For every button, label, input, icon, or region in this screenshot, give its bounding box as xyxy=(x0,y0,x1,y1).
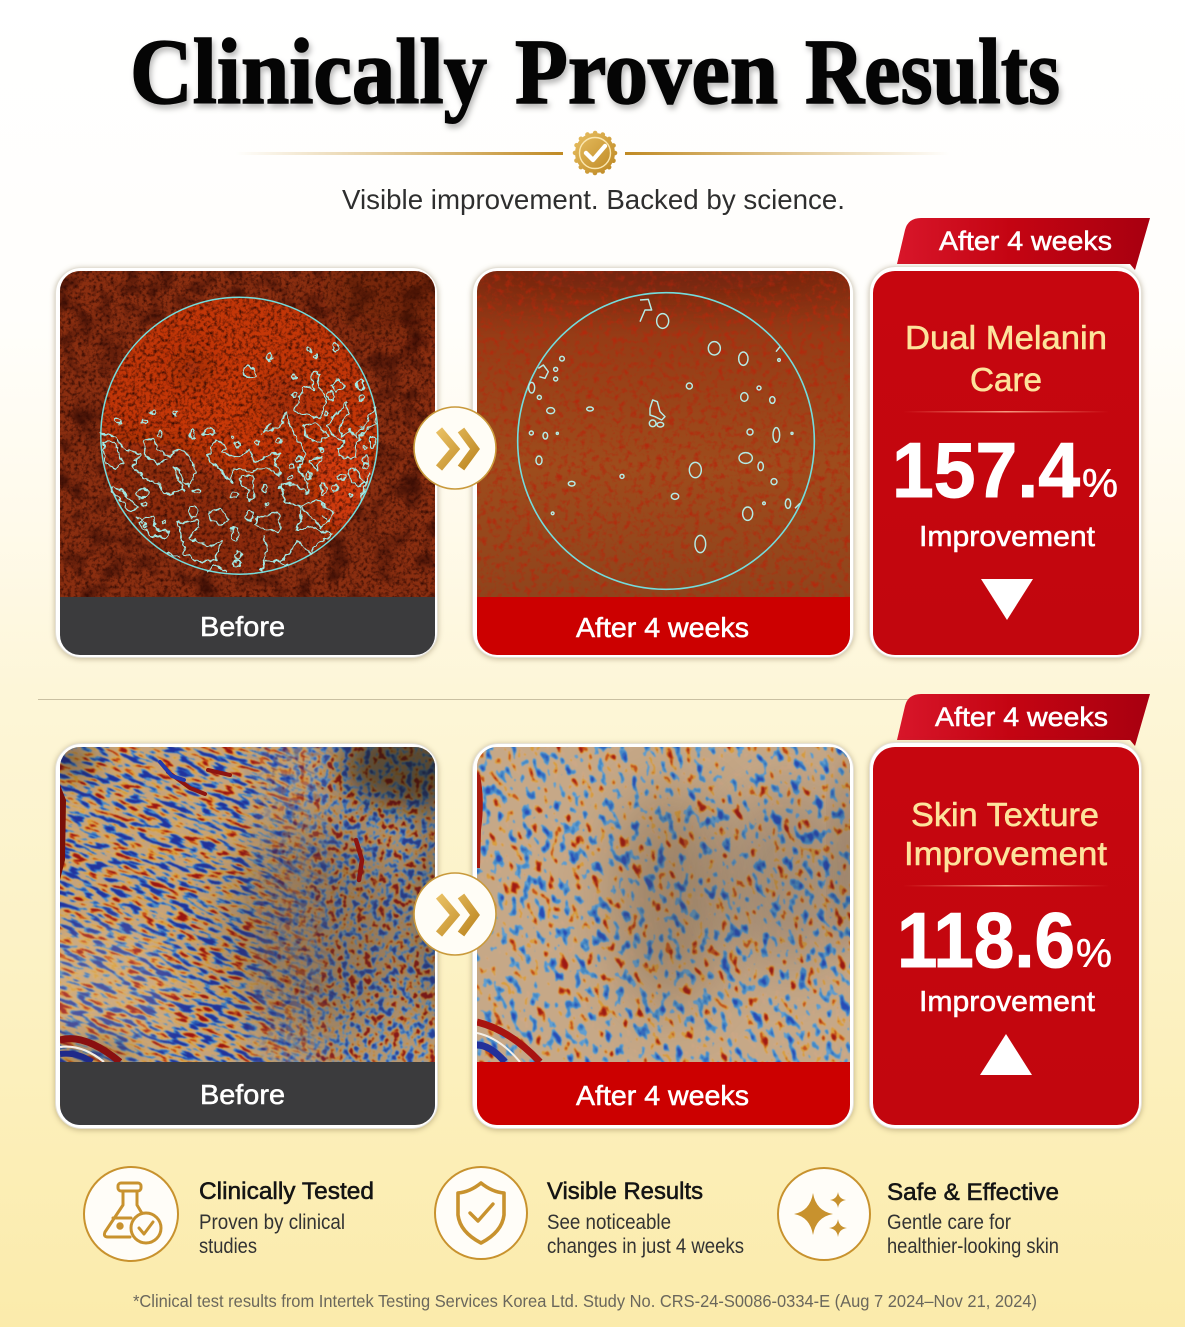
label: after 4 weeks: After 4 weeks xyxy=(576,612,749,643)
feature text: See noticeable xyxy=(547,1211,671,1234)
panel: texture before xyxy=(52,741,441,1133)
label: before: Before xyxy=(200,1079,285,1110)
feature text: healthier-looking skin xyxy=(887,1235,1059,1258)
panel: melanin before xyxy=(56,250,470,658)
statistic: 118.6 xyxy=(897,896,1075,984)
cyan measurement circle xyxy=(101,297,378,574)
heading xyxy=(904,796,1107,872)
melanin after image xyxy=(477,264,850,597)
heading xyxy=(905,319,1107,398)
label: after 4 weeks: After 4 weeks xyxy=(576,1080,749,1111)
feature text: Visible Results xyxy=(547,1178,703,1205)
title xyxy=(130,21,1060,124)
panel: dual melanin care result xyxy=(870,266,1142,658)
icon: sparkles xyxy=(778,1168,870,1260)
tab: after 4 weeks melanin xyxy=(897,218,1150,270)
statistic: 157.4 xyxy=(892,426,1080,514)
panel: melanin after xyxy=(472,264,854,658)
arrow: melanin before to after xyxy=(414,407,496,489)
title divider with badge xyxy=(235,133,950,173)
feature text: Safe & Effective xyxy=(887,1179,1059,1206)
heading: Skin Texture xyxy=(911,796,1099,833)
icon: down triangle xyxy=(981,579,1033,620)
feature text: studies xyxy=(199,1235,257,1258)
melanin spot outlines xyxy=(518,293,814,589)
tab: after 4 weeks melanin: After 4 weeks xyxy=(939,226,1112,256)
arrow: texture before to after xyxy=(414,873,496,955)
icon: shield with check xyxy=(435,1167,527,1259)
label bar: before xyxy=(60,1062,435,1126)
tab: after 4 weeks texture: After 4 weeks xyxy=(935,702,1108,732)
icon: up triangle xyxy=(980,1034,1032,1075)
heading: Dual Melanin xyxy=(905,319,1107,356)
title: Proven xyxy=(515,21,778,124)
footnote: *Clinical test results from Intertek Testing Services Korea Ltd. Study No. CRS-24-S0086-0334-E (Aug 7 2024–Nov 21, 2024) xyxy=(133,1291,1037,1311)
icon: gold check badge xyxy=(575,133,615,173)
feature: visible results xyxy=(435,1167,744,1259)
feature text xyxy=(547,1178,744,1258)
texture before image xyxy=(60,747,435,1125)
feature: clinically tested xyxy=(84,1167,374,1261)
panel: texture after xyxy=(469,741,857,1133)
title: Clinically xyxy=(130,21,487,124)
feature text: Clinically Tested xyxy=(199,1178,374,1205)
title: Results xyxy=(805,21,1060,124)
feature text: Gentle care for xyxy=(887,1211,1011,1234)
label bar: after 4 weeks xyxy=(477,597,850,655)
feature: safe and effective xyxy=(778,1168,1059,1260)
feature text: changes in just 4 weeks xyxy=(547,1235,744,1258)
percent sign: % xyxy=(1076,932,1112,976)
texture after image xyxy=(477,747,850,1125)
subtitle: Visible improvement. Backed by science. xyxy=(342,184,845,215)
feature text xyxy=(887,1179,1059,1258)
icon: flask with check xyxy=(84,1167,178,1261)
heading: Improvement xyxy=(904,835,1107,872)
label bar: before xyxy=(60,597,435,655)
label: before: Before xyxy=(200,611,285,642)
label bar: after 4 weeks xyxy=(477,1062,850,1126)
improvement label: Improvement xyxy=(919,986,1095,1018)
improvement label: Improvement xyxy=(919,521,1095,553)
feature text: Proven by clinical xyxy=(199,1211,345,1234)
panel: skin texture result xyxy=(870,742,1142,1128)
heading: Care xyxy=(970,361,1042,398)
divider xyxy=(38,699,1147,700)
melanin spot outlines xyxy=(100,344,377,572)
feature text xyxy=(199,1178,374,1258)
melanin before image xyxy=(60,271,435,597)
percent sign: % xyxy=(1082,462,1118,506)
tab: after 4 weeks texture xyxy=(897,694,1150,746)
